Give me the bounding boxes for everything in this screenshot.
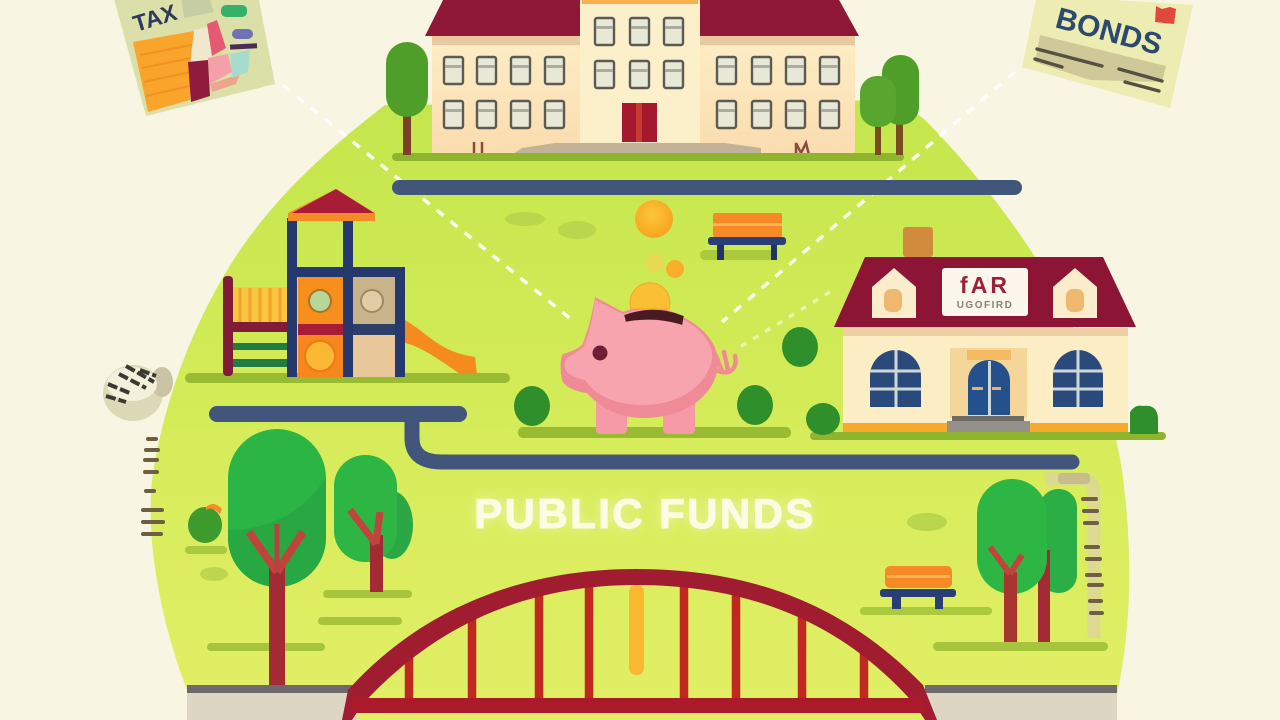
bushes	[514, 327, 818, 426]
playground roof	[288, 189, 375, 221]
door	[622, 103, 657, 142]
right arched window	[1053, 350, 1103, 407]
coin slot	[626, 311, 682, 323]
school ground	[392, 153, 904, 161]
card: bonds document	[1022, 0, 1193, 108]
bridge	[342, 569, 937, 720]
bonds label: BONDS	[1052, 2, 1165, 62]
house ground	[810, 432, 1166, 440]
steps	[513, 143, 761, 154]
grass tufts right	[907, 513, 947, 531]
grass lines left	[211, 594, 408, 647]
coin above slot	[630, 254, 684, 309]
yellow post	[629, 585, 644, 675]
coin falling large	[635, 200, 673, 238]
pig ground	[518, 427, 791, 438]
pig body	[561, 297, 718, 418]
tax label: TAX	[130, 0, 180, 37]
bench lower right	[860, 566, 992, 615]
tree: school left	[386, 42, 428, 155]
road band under bridge left	[187, 685, 357, 720]
dashed stripes left	[143, 439, 163, 534]
title: PUBLIC FUNDS	[474, 490, 816, 537]
title glow: PUBLIC FUNDS	[474, 490, 816, 537]
roof	[425, 0, 859, 36]
card: tax document	[113, 0, 275, 116]
red tag	[1155, 6, 1176, 24]
shrub left	[185, 504, 228, 581]
slide	[405, 320, 477, 374]
tree: large left	[228, 429, 326, 685]
piggy bank	[561, 297, 736, 434]
dashed flow line from house	[735, 292, 830, 350]
bench upper	[700, 213, 786, 260]
school building	[425, 0, 859, 156]
nest decoration left	[103, 365, 173, 421]
road lower curved	[412, 416, 1072, 462]
road band under bridge right	[925, 685, 1117, 720]
house roof	[834, 257, 1136, 327]
dashed stripes right	[1045, 473, 1102, 638]
tree: small left	[334, 455, 413, 592]
entrance	[947, 348, 1030, 434]
trees: school right	[860, 55, 919, 155]
house walls	[843, 329, 1128, 424]
tail	[716, 352, 736, 372]
playground ground	[185, 373, 510, 383]
left dormer	[872, 268, 916, 318]
road upper	[392, 180, 1022, 195]
eye	[592, 346, 608, 360]
green hill	[151, 100, 1129, 720]
playground	[185, 189, 510, 383]
road lower left	[209, 406, 467, 422]
dashed flow line from bonds	[722, 72, 1015, 322]
office sign: fAR	[960, 272, 1010, 298]
dashed flow line from tax	[283, 85, 572, 320]
bushes by house	[806, 403, 1158, 435]
left arched window	[870, 350, 921, 407]
right dormer	[1053, 268, 1097, 318]
grass tufts upper	[505, 212, 596, 239]
office sign	[942, 268, 1028, 316]
tree pair right	[977, 479, 1077, 643]
ground right trees	[933, 642, 1108, 651]
central tower	[580, 0, 700, 146]
tax office house	[834, 227, 1136, 434]
bridge deck	[352, 698, 926, 713]
chimney	[903, 227, 933, 257]
office sign: UGOFIRD	[957, 300, 1013, 311]
bridge arch	[342, 569, 937, 720]
